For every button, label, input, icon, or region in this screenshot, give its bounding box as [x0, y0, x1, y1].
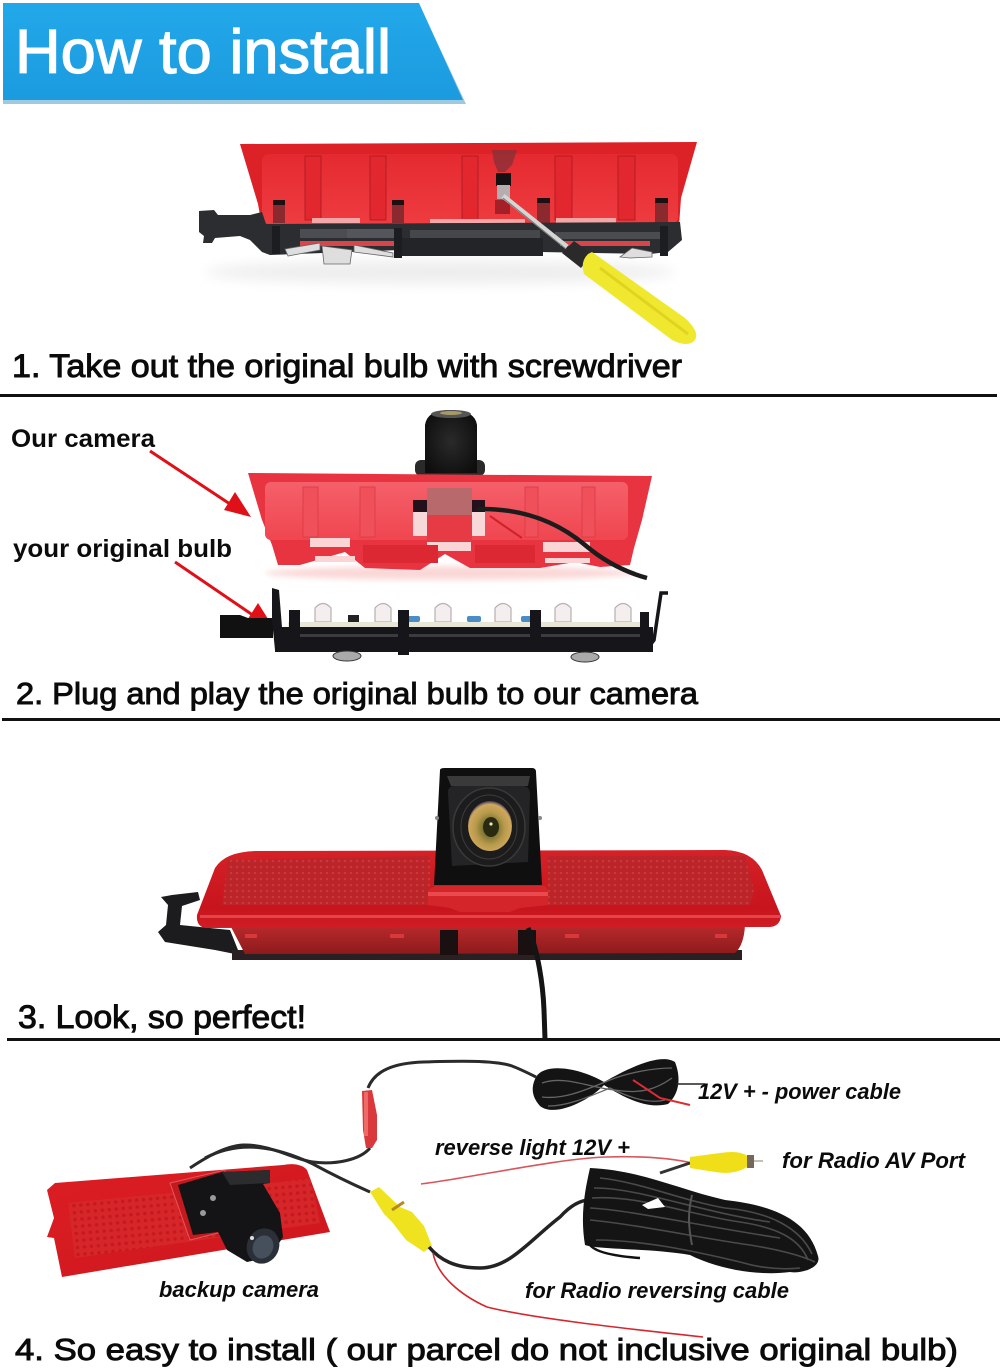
step 4 caption: 4. So easy to install ( our parcel do not inclusive original bulb) [15, 1332, 958, 1367]
camera on mount [428, 768, 548, 912]
small power cable coil [533, 1059, 705, 1110]
screwdriver [503, 196, 696, 344]
panel: step 2 camera lamp and bulb strip photo [220, 410, 668, 662]
reddish glow below lamp [265, 566, 635, 580]
yellow RCA connector [370, 1187, 432, 1252]
arrow: to our camera [150, 451, 251, 517]
panel: step 3 assembled camera photo [158, 768, 781, 1039]
step 1 caption: 1. Take out the original bulb with screwdriver [12, 348, 682, 384]
shadow under lamp [205, 260, 675, 284]
rear camera on lamp [415, 410, 485, 476]
camera cable [528, 928, 545, 1039]
black cable to coil [429, 1200, 590, 1268]
label: radio AV port: for Radio AV Port [782, 1148, 967, 1173]
lower lamp body [230, 925, 745, 960]
arrow: to original bulb [175, 562, 275, 630]
RCA plug for radio AV port [660, 1152, 763, 1173]
black bulb bar and connector [199, 210, 682, 258]
label: 12V power cable: 12V + - power cable [698, 1079, 901, 1104]
connector clip [158, 892, 240, 955]
panel: step 4 full kit photo [47, 1059, 818, 1337]
label: backup camera: backup camera [159, 1277, 319, 1302]
red lamp housing [248, 473, 652, 570]
camera wire [477, 509, 647, 578]
cables from camera [190, 1061, 536, 1192]
callout: your original bulb: your original bulb [13, 535, 232, 563]
metal clips [285, 243, 652, 264]
red power adapter [362, 1090, 377, 1148]
backup camera [170, 1170, 285, 1269]
original bulb strip [220, 588, 668, 662]
red wire lower [433, 1253, 703, 1337]
banner: How to install [3, 3, 466, 104]
lamp housing [240, 142, 697, 226]
step 3 caption: 3. Look, so perfect! [18, 999, 306, 1035]
banner: How to install: How to install [15, 18, 391, 87]
backup lamp [47, 1164, 330, 1277]
main lamp lens [197, 850, 781, 928]
label: reverse light: reverse light 12V + [435, 1135, 630, 1160]
long cable coil [583, 1168, 818, 1273]
callout: Our camera: Our camera [11, 425, 156, 453]
step 2 caption: 2. Plug and play the original bulb to our camera [16, 676, 699, 711]
label: radio reversing cable: for Radio reversing cable [525, 1278, 789, 1303]
panel: step 1 lamp and screwdriver photo [199, 142, 697, 344]
red wire reverse light [421, 1157, 692, 1184]
